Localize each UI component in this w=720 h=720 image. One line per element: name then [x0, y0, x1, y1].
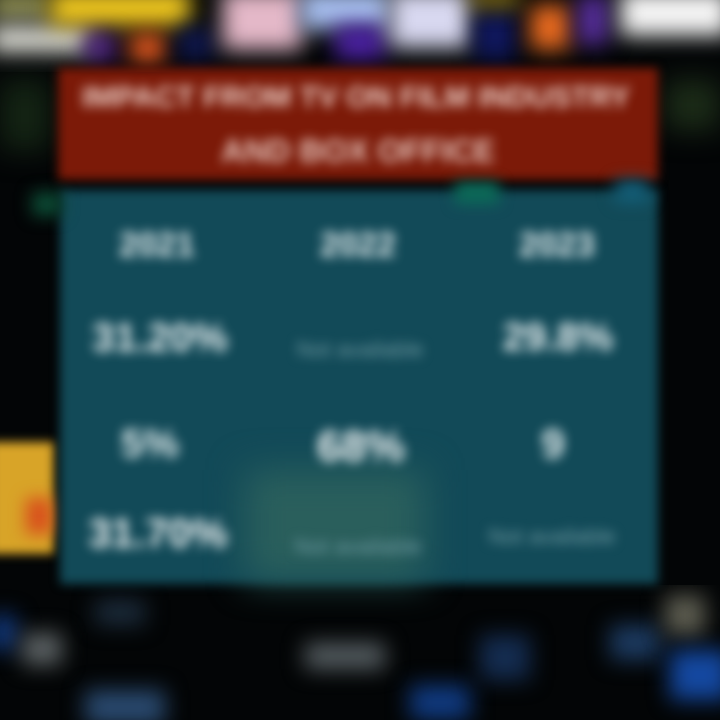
side decoration: dark green edge — [0, 80, 50, 150]
stat label: row 3 column 3: Not available — [488, 524, 616, 549]
side decoration: poster accent — [26, 498, 52, 534]
tint top marker — [455, 182, 499, 204]
stat value: row 2 column 3: 9 — [541, 420, 565, 467]
stat heading: column 3: 2023 — [519, 226, 595, 264]
stat label: row 1 column 2: Not available — [296, 337, 424, 362]
stat value: row 1 column 3: 29.8% — [503, 316, 613, 359]
left green marker — [32, 192, 62, 216]
stat label: row 3 column 2: Not available — [294, 534, 422, 559]
top colourful stage strip — [0, 0, 720, 72]
panel: statistics — [60, 190, 658, 584]
panel tint — [245, 470, 425, 580]
stat value: row 2 column 2: 68% — [317, 422, 405, 471]
stat value: row 1 column 1: 31.20% — [92, 316, 228, 360]
side decoration: right green edge — [665, 80, 720, 130]
subtitle: AND BOX OFFICE — [221, 133, 495, 169]
stat value: row 3 column 1: 31.70% — [88, 510, 228, 556]
right teal marker — [615, 180, 649, 202]
stat value: row 2 column 1: 5% — [121, 422, 179, 466]
title: IMPACT FROM TV ON FILM INDUSTRY — [82, 81, 630, 114]
panel: title banner — [58, 68, 658, 180]
side decoration: yellow poster — [0, 442, 54, 554]
crowd at bottom — [0, 585, 720, 720]
stat heading: column 2: 2022 — [320, 226, 396, 264]
stat heading: column 1: 2021 — [119, 226, 195, 264]
